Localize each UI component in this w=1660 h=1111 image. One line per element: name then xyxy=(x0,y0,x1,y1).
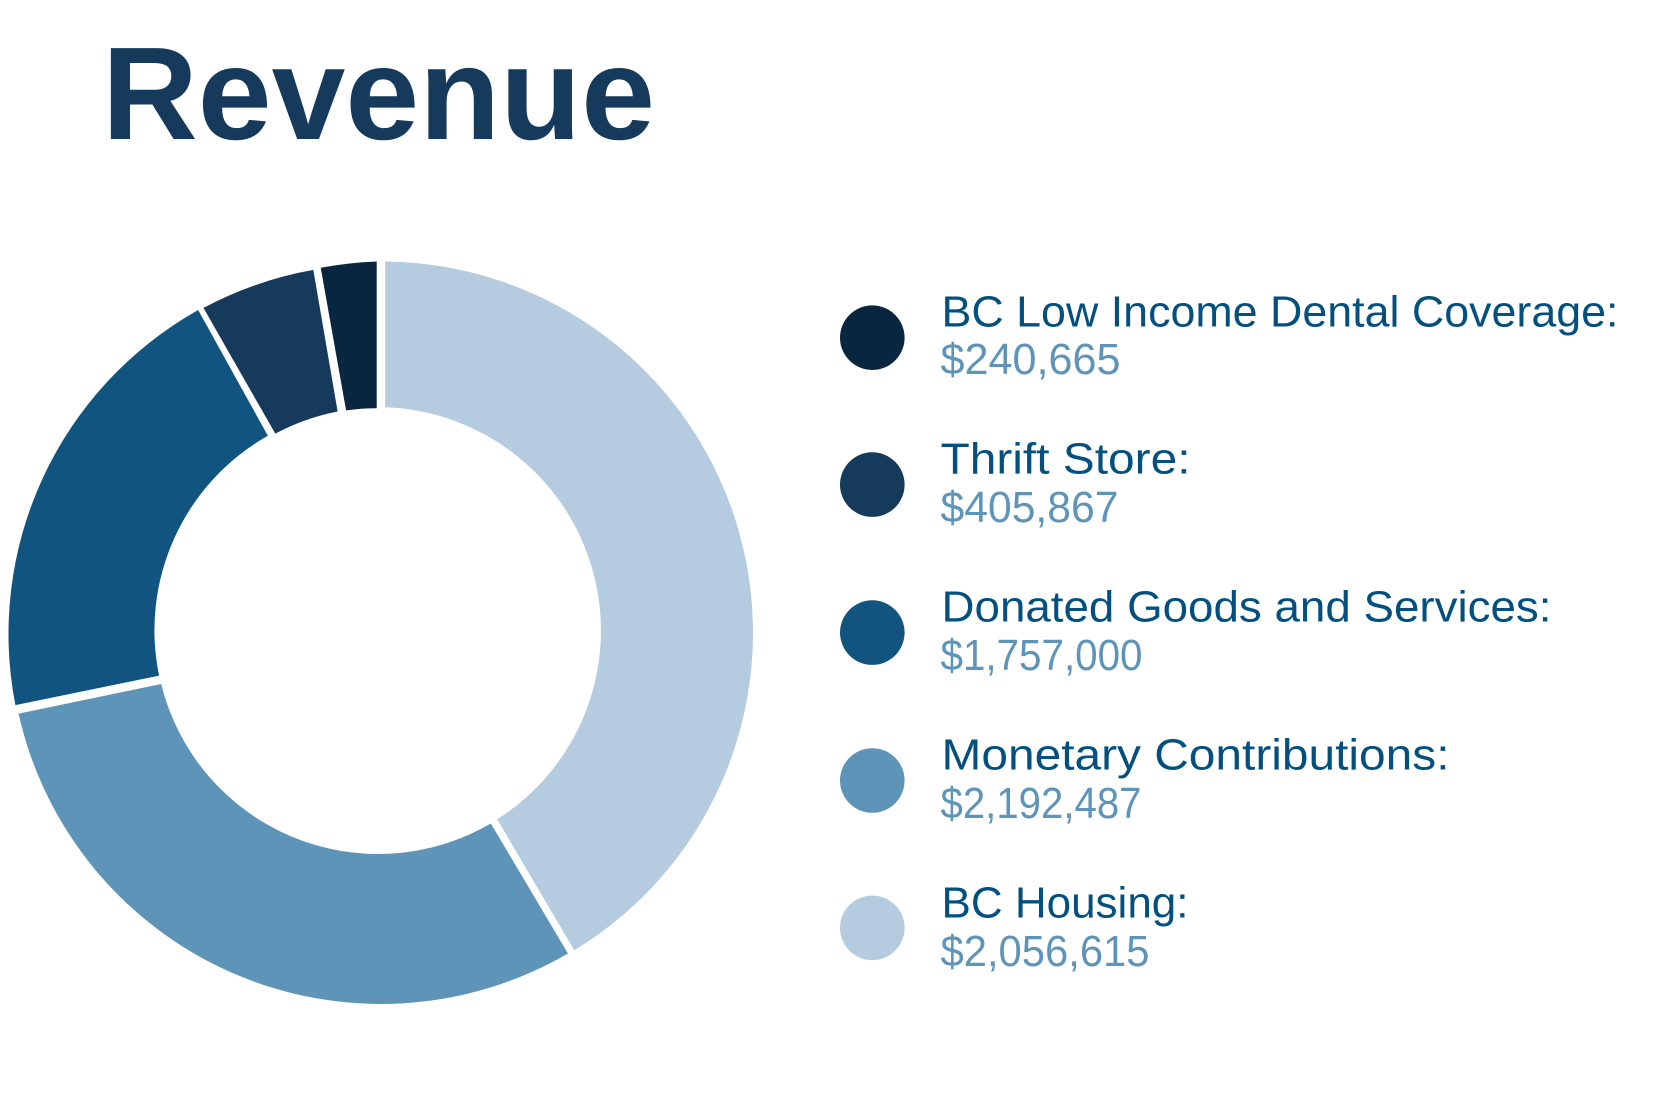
legend item: BC Low Income Dental Coverage xyxy=(840,288,1618,384)
donut chart xyxy=(8,261,753,1004)
legend dot xyxy=(840,600,905,665)
legend dot xyxy=(840,748,905,813)
legend value: $240,665 xyxy=(940,335,1120,384)
segment: BC Low Income Dental Coverage xyxy=(321,261,377,410)
legend item: Monetary Contributions xyxy=(840,730,1450,828)
segment: BC Housing xyxy=(385,261,753,950)
legend item: Donated Goods and Services xyxy=(840,582,1552,680)
legend label: BC Low Income Dental Coverage: xyxy=(942,288,1618,336)
legend dot xyxy=(840,452,905,517)
segment: Donated Goods and Services xyxy=(8,310,268,705)
segment: Monetary Contributions xyxy=(19,684,568,1004)
legend label: Thrift Store: xyxy=(940,434,1190,484)
legend value: $405,867 xyxy=(940,483,1118,532)
segment: Thrift Store xyxy=(203,270,338,434)
legend value: $2,056,615 xyxy=(940,927,1150,976)
legend item: BC Housing xyxy=(840,878,1188,976)
legend label: Donated Goods and Services: xyxy=(942,582,1552,632)
legend dot xyxy=(840,896,905,960)
legend value: $2,192,487 xyxy=(940,779,1142,828)
title: Revenue xyxy=(102,20,655,167)
legend label: Monetary Contributions: xyxy=(942,730,1450,780)
legend value: $1,757,000 xyxy=(940,631,1142,680)
legend xyxy=(840,288,1618,976)
legend dot xyxy=(840,305,905,370)
legend label: BC Housing: xyxy=(942,878,1188,928)
legend item: Thrift Store xyxy=(840,434,1190,532)
